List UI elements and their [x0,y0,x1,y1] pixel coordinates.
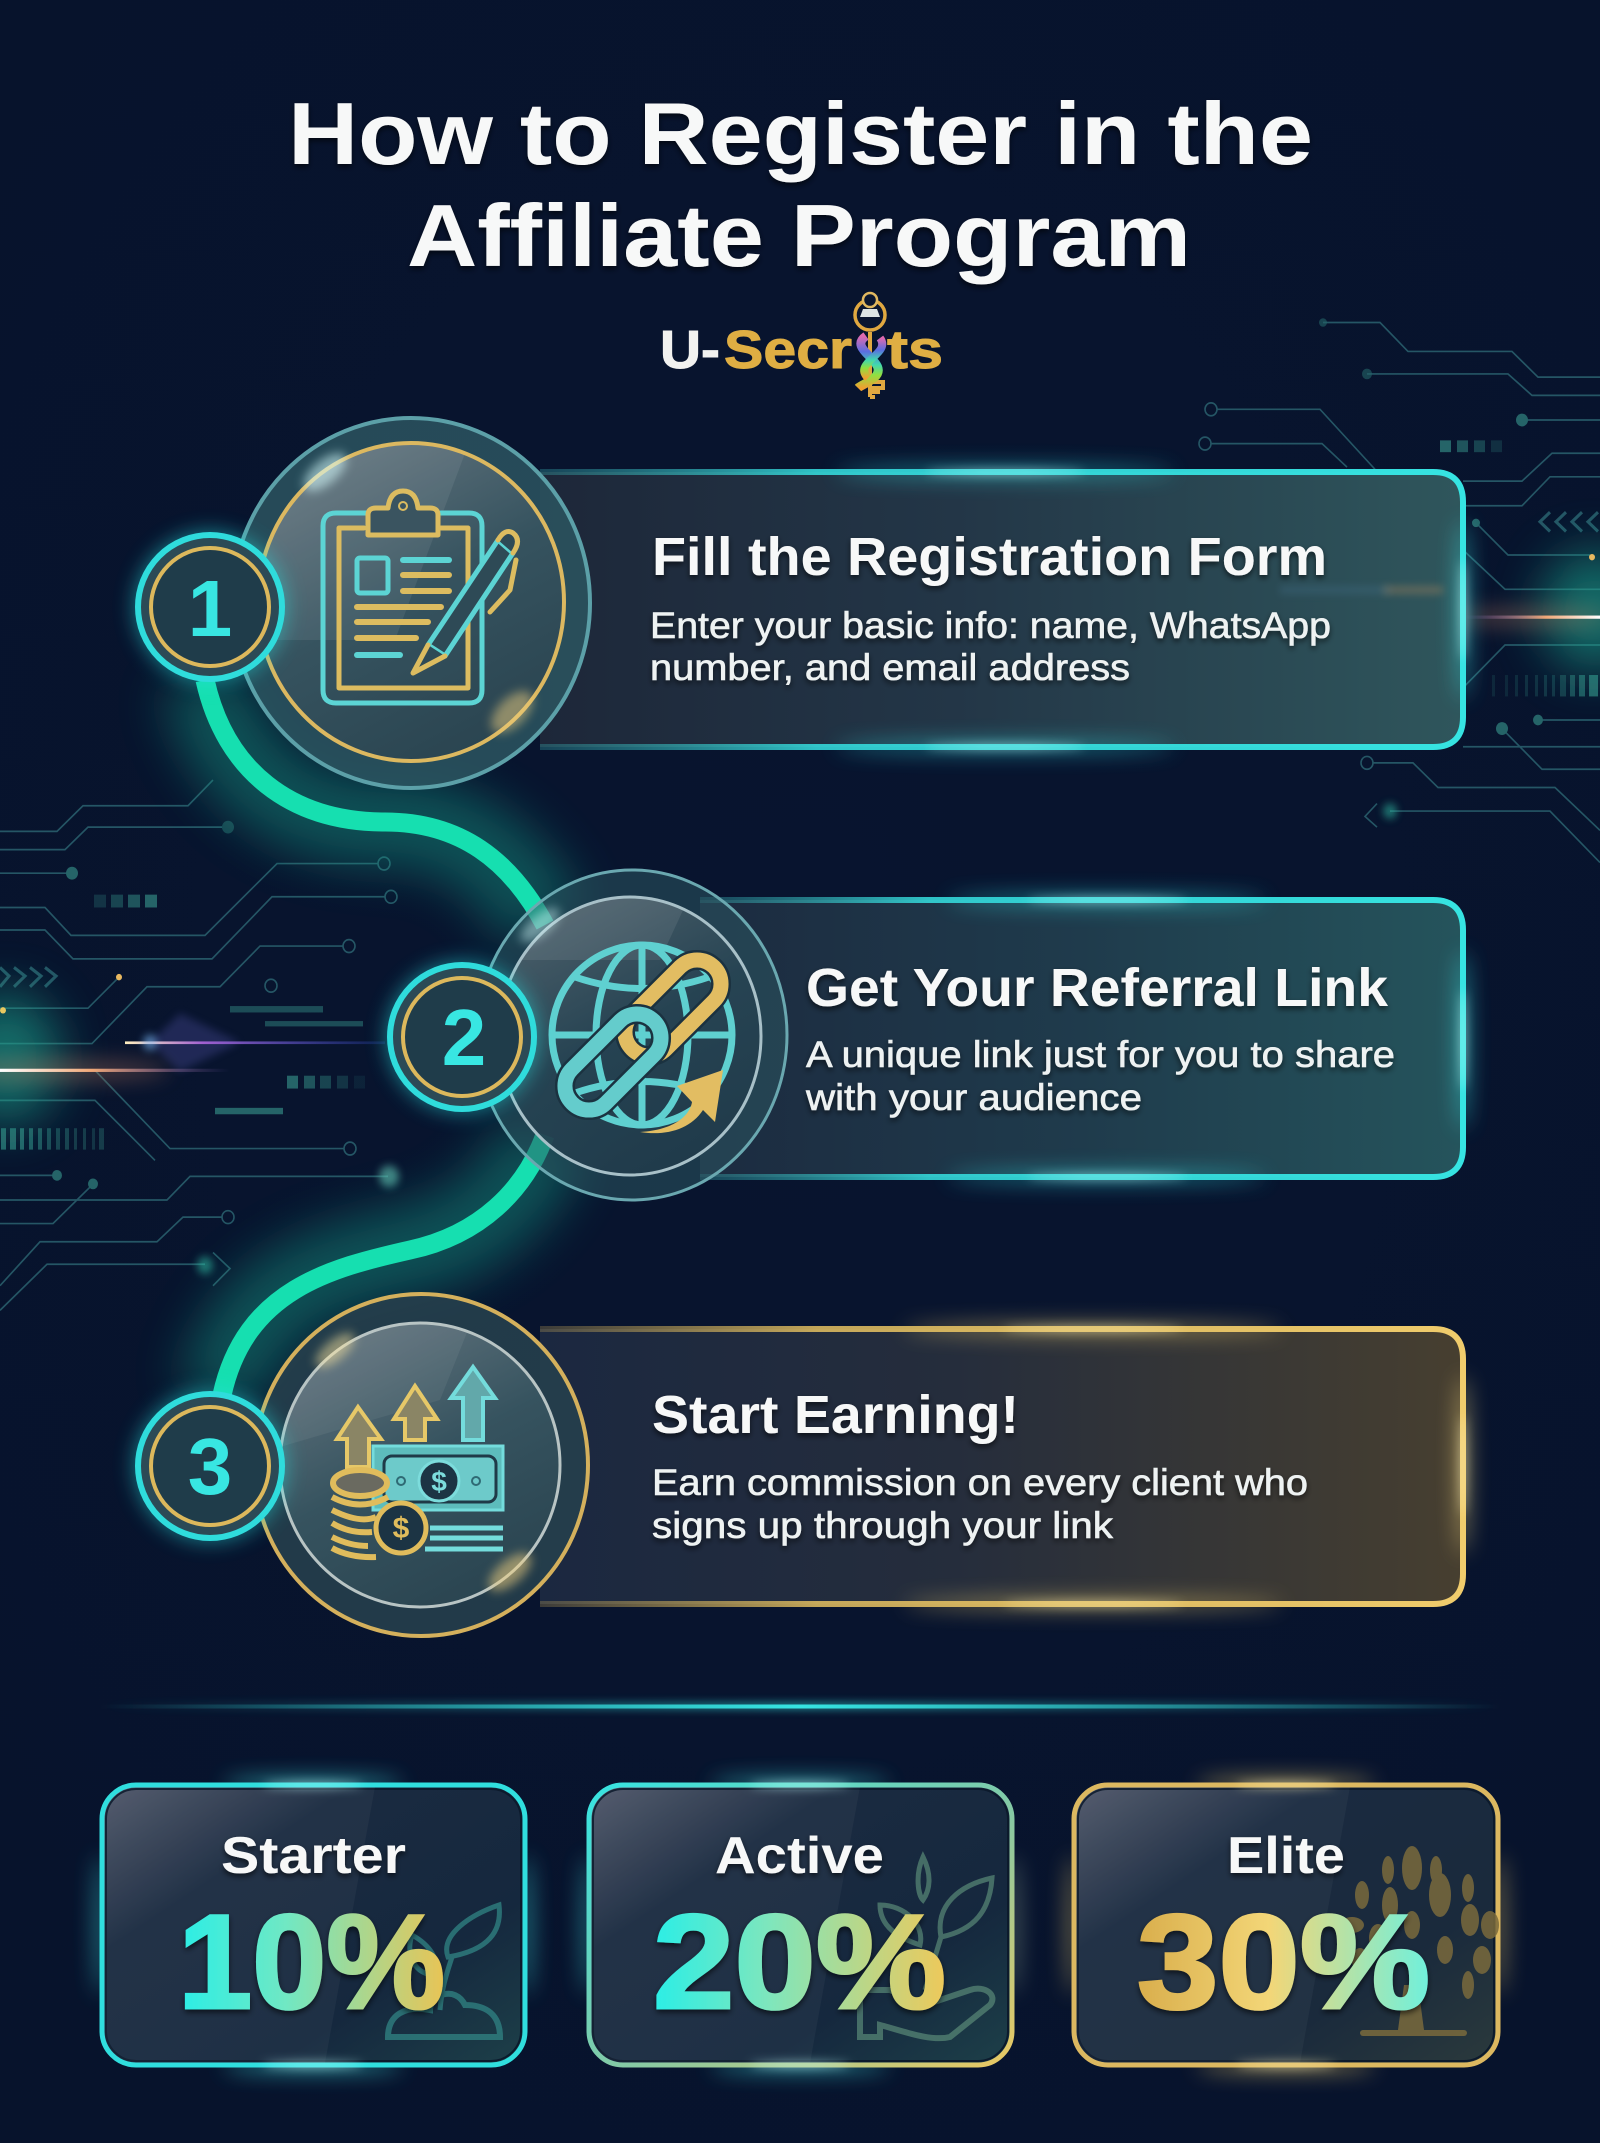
tier card: Active 20%: Active [715,1827,884,1885]
circuit pattern: left [0,780,397,1310]
divider [100,1702,1500,1710]
panel: step 1 card [540,466,1469,753]
icon: tree watermark [1340,1846,1499,2036]
lens flares: left [0,974,399,1274]
tier card: Elite 30%: Elite [1227,1827,1345,1885]
circuit pattern: right [1199,318,1600,863]
text: step 3 [652,1385,1308,1546]
glass circle: step 1 [232,418,590,788]
text: step 1: number, and email address [650,647,1130,688]
tier card: Active 20% [582,1778,1019,2072]
icon: sprout watermark [388,1905,500,2037]
tier card: Starter 10%: 10% [178,1888,445,2037]
tier card: Elite 30%: 30% [1137,1888,1430,2037]
tier card: Active 20%: 20% [653,1888,946,2037]
text: step 1: Enter your basic info: name, WhatsApp [650,605,1331,646]
badge: step 1 [134,531,286,683]
icon: money and growth arrows [332,1367,503,1557]
text: step 2: A unique link just for you to share [806,1034,1395,1075]
tier card: Starter 10% [95,1778,532,2072]
panel: step 2 card [700,894,1469,1183]
title: How to Register in the [288,84,1313,183]
tier card: Elite 30% [1067,1778,1505,2072]
text: step 1 [650,527,1331,688]
title [288,84,1313,285]
icon: money and growth arrows: $ [431,1466,447,1497]
text: step 2 [805,958,1395,1118]
text: step 2: with your audience [805,1077,1142,1118]
logo: U-Secrets [660,293,943,397]
badge: step 2 [386,961,538,1113]
tier card: Starter 10%: Starter [221,1827,406,1885]
icon: money and growth arrows: $ [393,1512,410,1545]
icon: hand with plant watermark [860,1857,992,2038]
text: step 1: Fill the Registration Form [652,527,1327,587]
logo: U-Secrets: U- [660,320,720,380]
connector path [205,680,545,1395]
badge: step 1: 1 [188,564,232,653]
title: Affiliate Program [407,186,1191,285]
text: step 3: Start Earning! [652,1385,1019,1445]
text: step 3: Earn commission on every client who [652,1462,1308,1503]
logo: U-Secrets: ts [887,320,943,380]
glass circle: step 3 [254,1294,588,1636]
logo: U-Secrets: Secr [724,320,852,380]
icon: clipboard and pen [323,491,518,703]
panel: step 3 card [540,1323,1469,1610]
badge: step 2: 2 [442,993,486,1082]
text: step 3: signs up through your link [652,1505,1114,1546]
icon: globe with chain link [552,945,732,1133]
text: step 2: Get Your Referral Link [806,958,1389,1018]
badge: step 3 [134,1390,286,1542]
lens flares: right [1383,552,1600,819]
glass circle: step 2 [477,870,787,1200]
badge: step 3: 3 [188,1422,232,1511]
icon: key with DNA helix [855,293,885,397]
